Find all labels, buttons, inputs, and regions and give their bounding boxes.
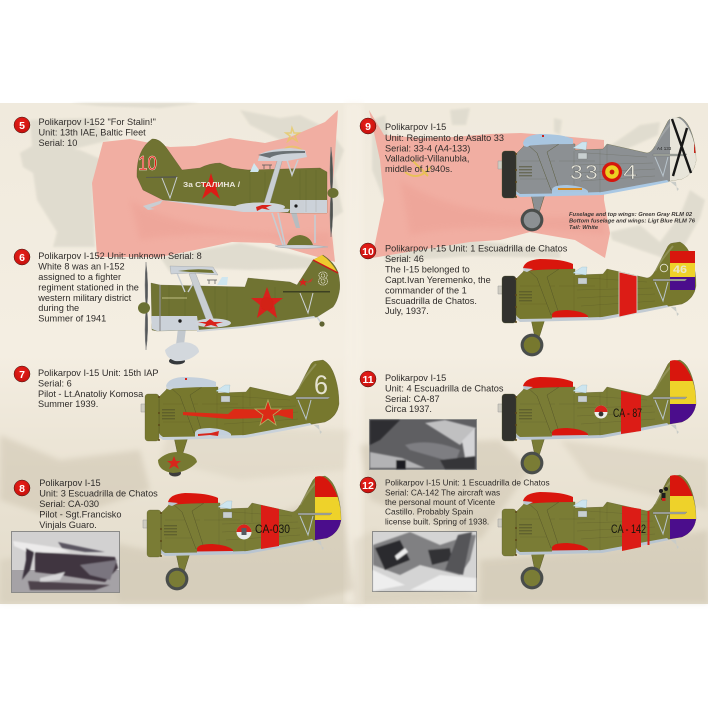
caption 5: Unit: 13th IAE, Baltic Fleet [38,127,146,137]
caption 8: Vinjals Guaro. [39,520,97,530]
tail code: A4 133 [657,146,672,151]
caption 10: Capt.Ivan Yeremenko, the [385,275,491,285]
caption 12: Serial: CA-142 The aircraft was [385,488,500,498]
ghost photo plane: lower right [354,440,708,603]
badge 10: 10 [362,246,374,258]
caption 7: Summer 1939. [38,399,98,409]
caption 7: Pilot - Lt.Anatoliy Komosa [38,389,144,399]
badge 12: 12 [362,480,374,492]
caption 11: Circa 1937. [385,404,432,414]
badge 12 [360,477,376,493]
tail number 8: 8 [318,269,328,289]
caption 9: Serial: 33-4 (A4-133) [385,144,470,154]
caption 6: assigned to a fighter [38,272,121,282]
caption 6: White 8 was an I-152 [38,262,125,272]
caption 12: Castillo. Probably Spain [385,507,473,517]
caption 6: Polikarpov I-152 Unit: unknown Serial: 8 [38,251,202,261]
plane 8: I-15 CA-030 [143,470,345,590]
badge 10 [360,243,376,259]
tail number 6: 6 [314,370,328,400]
badge 11: 11 [362,374,374,386]
caption 12: the personal mount of Vicente [385,497,495,507]
caption 8: Unit: 3 Escuadrilla de Chatos [39,489,158,499]
badge 9: 9 [365,121,371,133]
photo: crashed plane (12) [372,532,476,592]
plane 5: I-152 For Stalin [137,139,338,248]
soviet flag right [369,110,610,258]
caption 8: Polikarpov I-15 [39,478,101,488]
caption 10: The I-15 belonged to [385,264,470,274]
fuselage code 4: 4 [623,162,637,184]
badge 5: 5 [19,120,25,132]
badge 7: 7 [19,369,25,381]
caption 5: Polikarpov I-152 "For Stalin!" [38,117,156,127]
plane 11: I-15 CA-87 [498,354,700,474]
badge 9 [360,118,376,134]
paint note 9: Fuselage and top wings: Green Gray RLM 02 [569,212,693,218]
caption 12: license built. Spring of 1938. [385,516,489,526]
caption 10: Escuadrilla de Chatos. [385,296,477,306]
badge 8 [14,480,30,496]
caption 10: Polikarpov I-15 Unit: 1 Escuadrilla de Chatos [385,244,568,254]
caption 9: Valladolid-Villanubla, [385,154,469,164]
caption 10: July, 1937. [385,306,429,316]
caption 8: Serial: CA-030 [39,499,99,509]
serial CA-142: CA - 142 [611,522,646,536]
photo: wrecked biplane (8) [12,532,120,592]
fuselage code 33: 33 [570,162,600,184]
paint note 9: Tail: White [569,225,599,231]
paint note 9: Bottom fuselage and wings: Ligt Blue RLM 76 [569,218,696,224]
photo: fuselage close-up (11) [370,420,476,470]
badge 7 [14,366,30,382]
label 10: 10 [138,153,157,175]
plane 7: I-15 white 6 [141,360,339,476]
badge 5 [14,117,30,133]
caption 6: Summer of 1941 [38,314,106,324]
paper background [0,103,708,604]
caption 11: Unit: 4 Escuadrilla de Chatos [385,384,504,394]
badge 6 [14,249,30,265]
badge 11 [360,371,376,387]
serial CA-030: CA-030 [255,522,290,536]
caption 8: Pilot - Sgt.Francisko [39,510,122,520]
serial CA-87: CA - 87 [613,406,642,420]
caption 7: Polikarpov I-15 Unit: 15th IAP [38,368,159,378]
caption 9: Unit: Regimento de Asalto 33 [385,133,504,143]
label za stalina: За СТАЛИНА / [183,180,241,189]
caption 6: during the [38,303,79,313]
caption 10: commander of the 1 [385,286,467,296]
caption 9: Polikarpov I-15 [385,122,446,132]
caption 11: Polikarpov I-15 [385,373,446,383]
badge 8: 8 [19,483,25,495]
plane 10: I-15 46 [498,242,696,356]
soviet flag left [92,110,338,262]
tail number 46: 46 [673,264,687,276]
caption 12: Polikarpov I-15 Unit: 1 Escuadrilla de Chatos [385,478,550,488]
caption 11: Serial: CA-87 [385,394,440,404]
faded map silhouettes [20,103,705,272]
caption 9: middle of 1940s. [385,164,452,174]
caption 10: Serial: 46 [385,254,424,264]
ghost photo plane: lower left [0,425,354,603]
plane 6: I-152 white 8 [138,255,340,364]
plane 12: I-15 CA-142 [498,469,700,589]
caption 7: Serial: 6 [38,378,72,388]
badge 6: 6 [19,252,25,264]
infographic canvas [0,102,708,606]
caption 6: regiment stationed in the [38,282,139,292]
caption 5: Serial: 10 [38,138,77,148]
plane 9: I-15 33-4 grey [498,111,700,231]
caption 6: western military district [37,293,132,303]
